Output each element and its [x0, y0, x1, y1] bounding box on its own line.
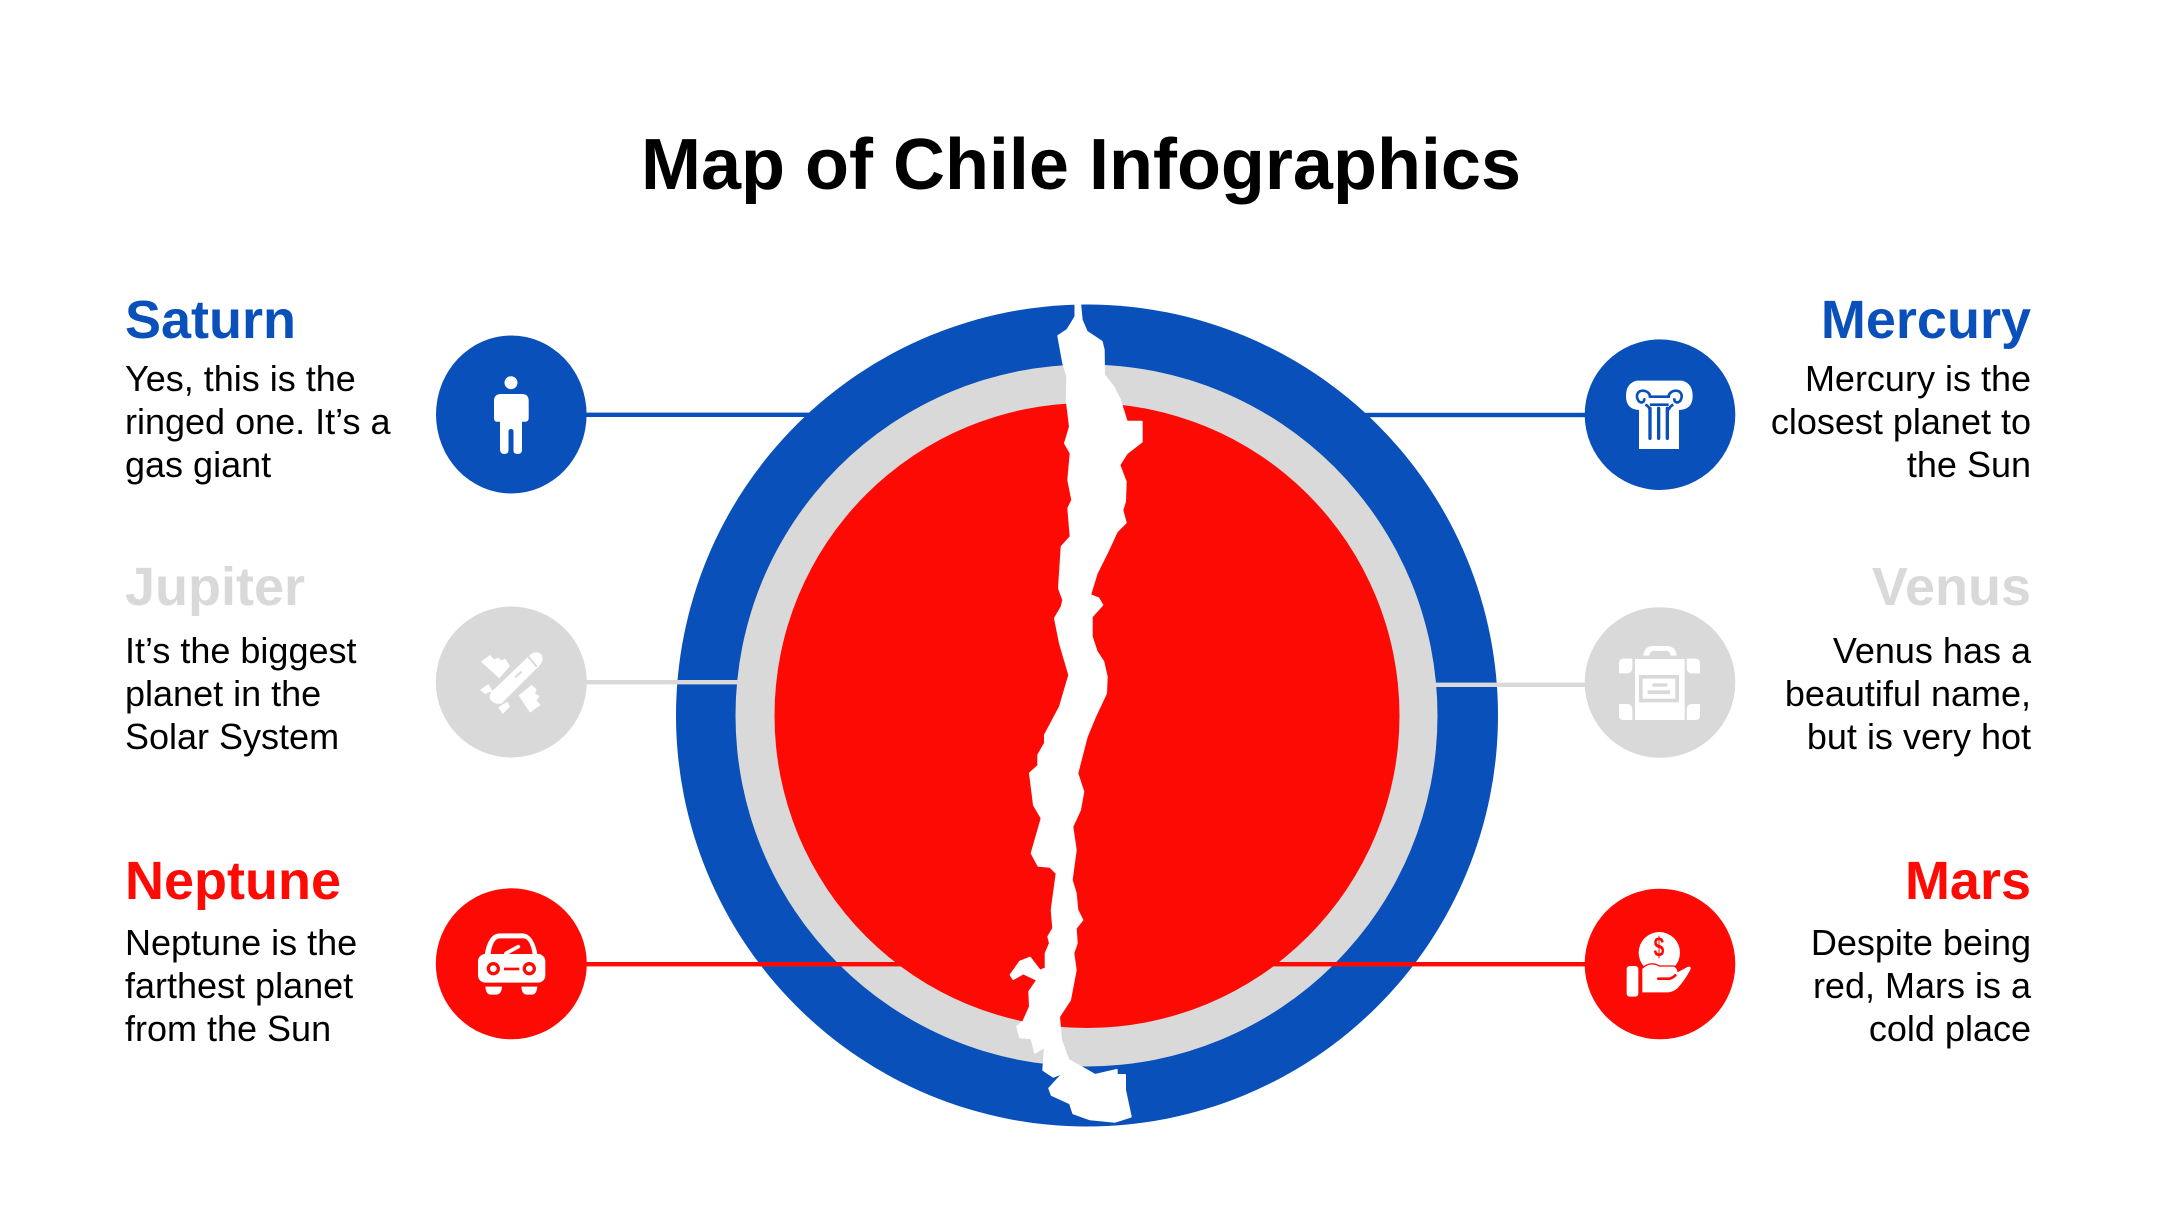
Chile silhouette [1011, 298, 1142, 1122]
icon: person [436, 336, 587, 494]
grey ring [736, 364, 1438, 1066]
panel: Mars [1585, 851, 2032, 1049]
panel: Venus [1585, 557, 2032, 758]
connector: Venus to ring [1433, 683, 1585, 687]
icon: column [1585, 339, 1735, 490]
heading: Venus: Venus [1872, 557, 2031, 617]
connector: Jupiter to ring [586, 680, 741, 684]
connector: Saturn [586, 413, 826, 417]
panel: Jupiter [125, 557, 587, 758]
icon: airplane [436, 606, 587, 758]
outer blue ring [676, 304, 1498, 1126]
connector: Mars to disc [1260, 962, 1585, 966]
text: Neptune description: farthest planet [125, 965, 353, 1006]
text: Mercury description: Mercury is the [1805, 358, 2031, 399]
panel: Mercury [1585, 290, 2031, 490]
icon: hand holding coin [1585, 889, 1735, 1039]
heading: Neptune: Neptune [125, 851, 341, 911]
title: Map of Chile Infographics [641, 125, 1521, 205]
heading: Jupiter: Jupiter [125, 557, 305, 617]
connector: Mercury [1350, 413, 1585, 417]
text: Venus description: beautiful name, [1785, 673, 2031, 714]
icon: briefcase [1585, 607, 1735, 758]
heading: Saturn: Saturn [125, 290, 296, 350]
text: Venus description: but is very hot [1807, 716, 2031, 757]
text: Mars description: red, Mars is a [1813, 965, 2032, 1006]
text: Jupiter description: Solar System [125, 716, 339, 757]
icon: hand holding coin: $ [1654, 932, 1664, 964]
text: Mercury description: closest planet to [1771, 401, 2031, 442]
text: Neptune description: Neptune is the [125, 922, 357, 963]
text: Mercury description: the Sun [1907, 444, 2031, 485]
text: Neptune description: from the Sun [125, 1008, 331, 1049]
icon: car [436, 888, 587, 1039]
text: Jupiter description: It’s the biggest [125, 630, 356, 671]
heading: Mars: Mars [1905, 851, 2031, 911]
text: Saturn description: ringed one. It’s a [125, 401, 391, 442]
text: Jupiter description: planet in the [125, 673, 321, 714]
red disc [774, 403, 1400, 1028]
text: Saturn description: gas giant [125, 444, 271, 485]
text: Saturn description: Yes, this is the [125, 358, 356, 399]
central map circle [586, 298, 1585, 1126]
text: Mars description: cold place [1869, 1008, 2031, 1049]
text: Mars description: Despite being [1811, 922, 2031, 963]
panel: Saturn [125, 290, 587, 494]
connector: Neptune to disc [586, 962, 916, 966]
text: Venus description: Venus has a [1833, 630, 2032, 671]
panel: Neptune [125, 851, 587, 1049]
heading: Mercury: Mercury [1821, 290, 2031, 350]
